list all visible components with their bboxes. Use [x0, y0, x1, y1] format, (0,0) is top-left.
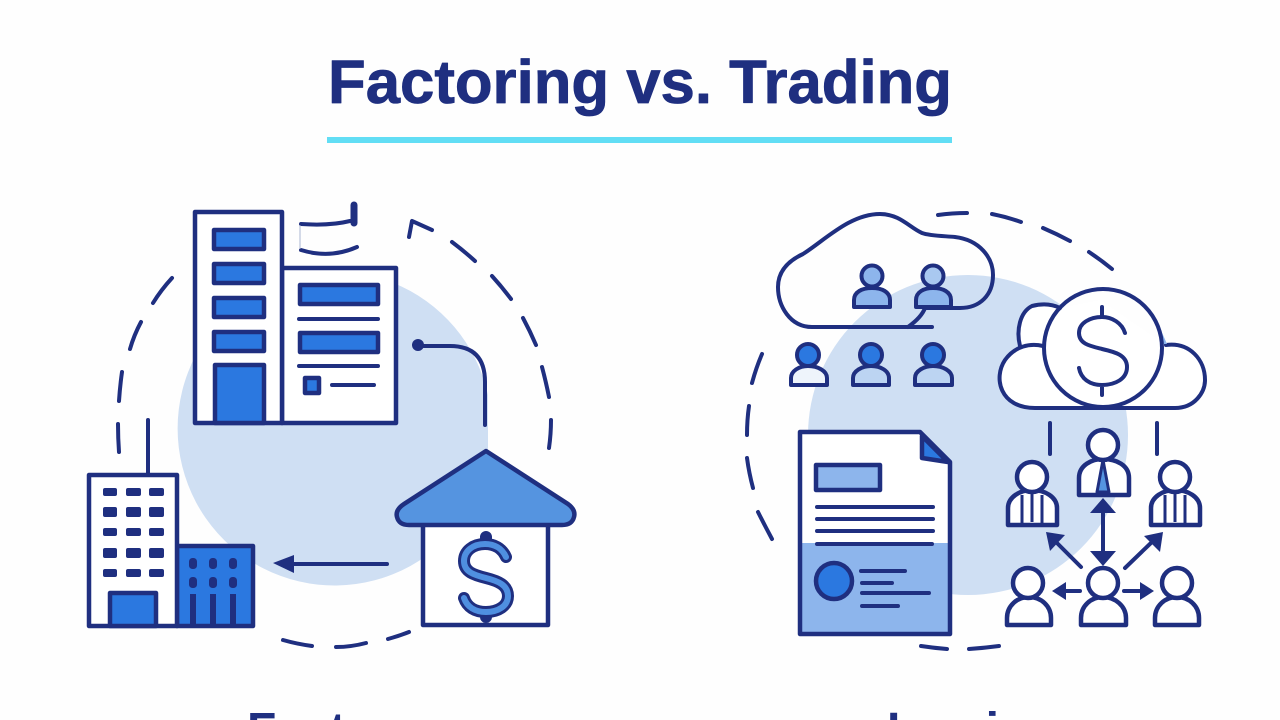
arrows between people — [1046, 498, 1163, 600]
suited people — [1008, 430, 1200, 525]
title: Factoring vs. Trading — [328, 48, 952, 116]
icon: document — [800, 432, 950, 634]
icon: speech cloud — [778, 214, 993, 327]
icon: row of three people — [791, 344, 952, 385]
title underline — [327, 137, 952, 143]
dashed ring — [747, 213, 1112, 649]
icon: roof mark above building — [300, 205, 357, 254]
dashed cycle ring with arrowhead — [118, 221, 551, 647]
connector lines — [1050, 423, 1157, 454]
plain people — [1007, 568, 1199, 625]
panel: trading illustration — [747, 213, 1205, 649]
icon: small office building — [89, 420, 253, 626]
background circle — [808, 275, 1128, 595]
icon: cloud with dollar coin — [1000, 289, 1205, 408]
background circle — [178, 272, 488, 586]
icon: people in cloud — [854, 266, 951, 307]
icon: bank house with dollar — [397, 451, 574, 625]
icon: network of people — [1007, 430, 1200, 625]
arrow: bank to small building — [273, 555, 387, 573]
connector from building to bank — [412, 339, 485, 425]
icon: large office building — [195, 212, 396, 423]
panel: factoring illustration — [89, 205, 574, 647]
